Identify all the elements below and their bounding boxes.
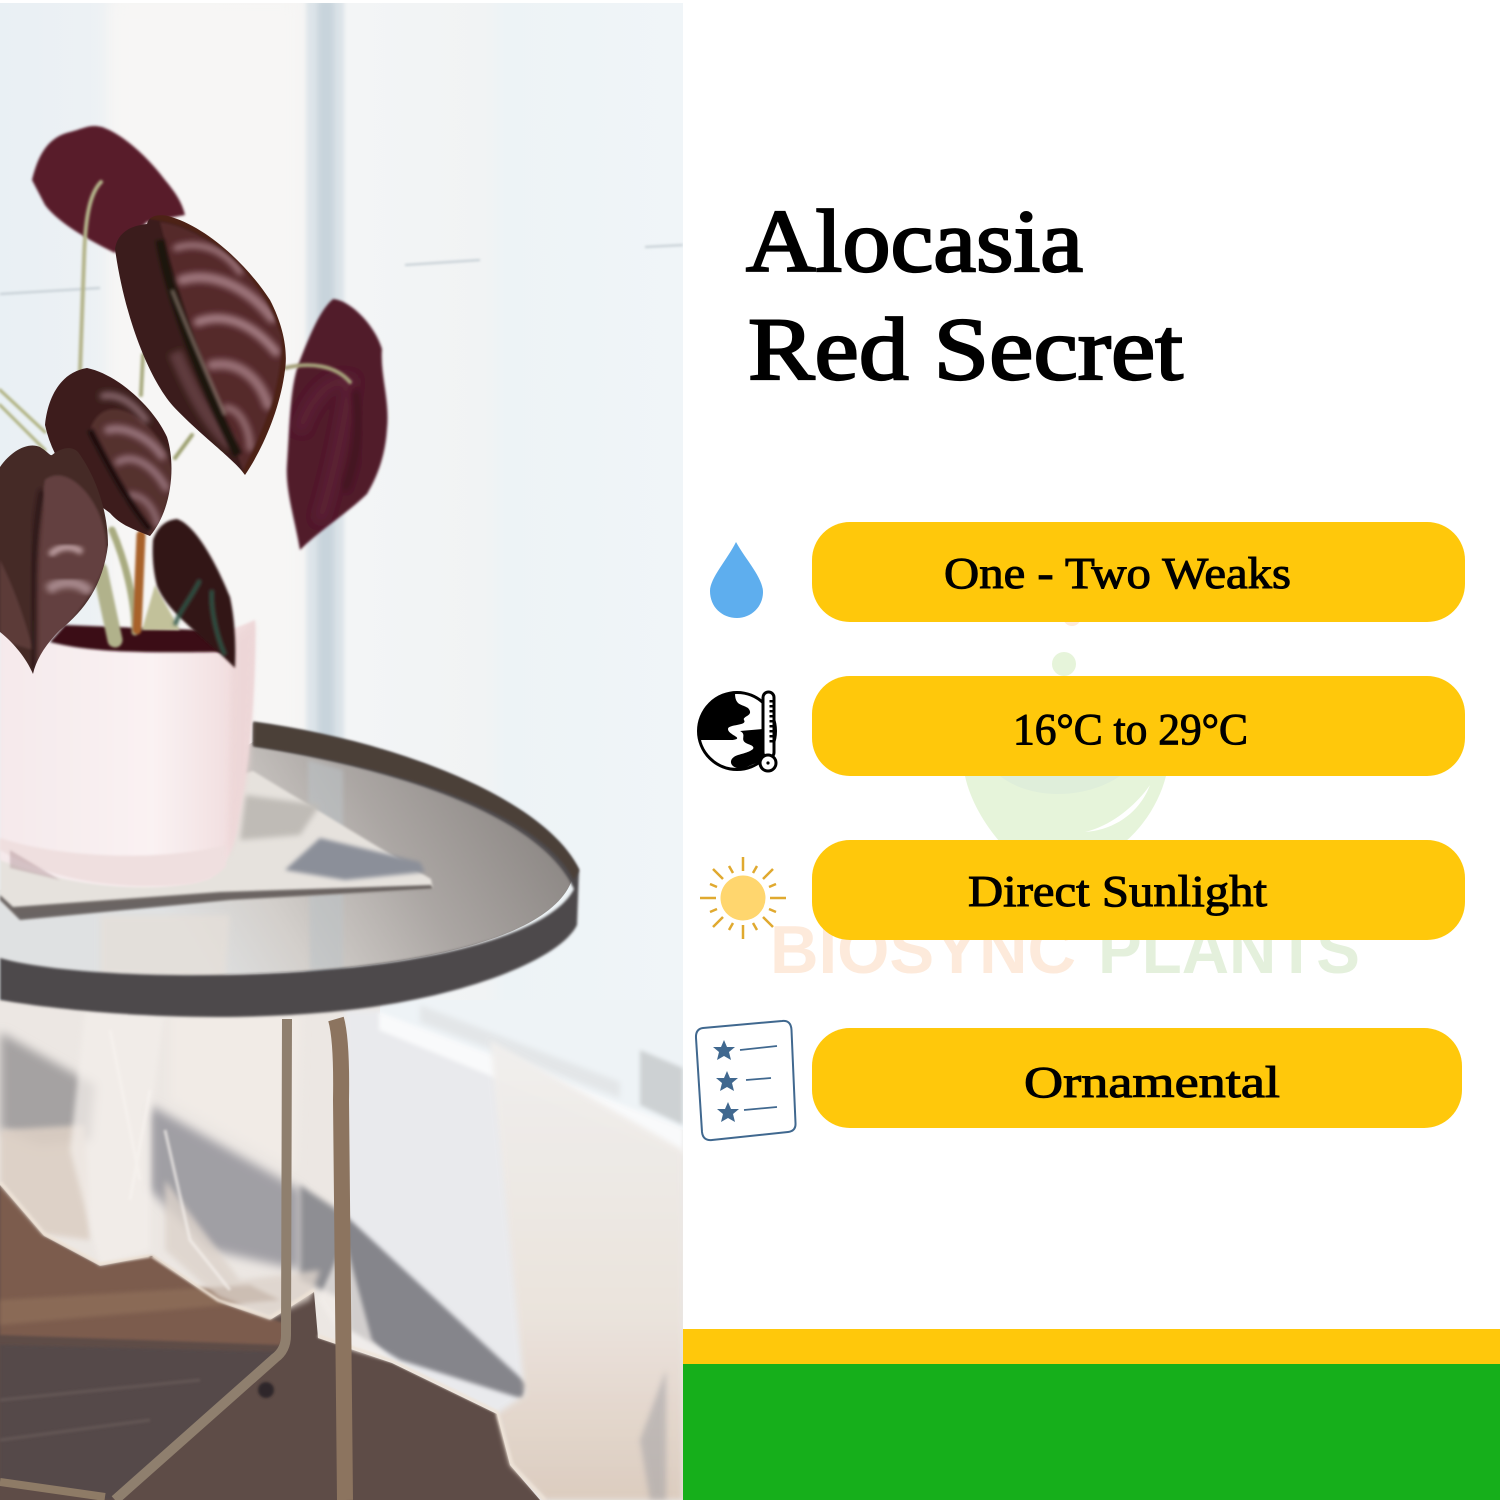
pill: light xyxy=(812,840,1465,940)
photo: middle patterned leaf xyxy=(45,368,172,536)
icon: water drop xyxy=(710,542,763,618)
photo: grey baseboard seen through the curtain xyxy=(0,1032,527,1399)
photo: leaf, back maroon xyxy=(32,126,185,253)
photo: lower wall and radiator xyxy=(0,1000,683,1500)
photo: wood floor xyxy=(0,1185,540,1500)
pill: temperature: 16°C to 29°C xyxy=(1013,705,1248,754)
photo: sheer curtain folds xyxy=(0,1010,683,1500)
title xyxy=(746,193,1183,399)
panel: plant photo xyxy=(0,0,683,1500)
photo: window wall background xyxy=(0,3,683,1000)
photo: round glass table top xyxy=(0,722,579,1017)
title: Alocasia xyxy=(746,193,1083,291)
photo: pot xyxy=(0,620,255,887)
photo: magazine xyxy=(0,771,433,920)
icon: sun xyxy=(700,857,786,939)
photo: lower left patterned leaf xyxy=(0,446,108,674)
photo: leaf, right maroon xyxy=(287,299,388,550)
watermark: Biosync Plants logo: BIOSYNC xyxy=(770,912,1076,988)
photo: soil in pot xyxy=(50,625,225,652)
pill: temperature xyxy=(812,676,1465,776)
photo: plant stems xyxy=(0,182,350,640)
footer: yellow band xyxy=(683,1329,1500,1364)
icon: rated checklist xyxy=(696,1021,796,1140)
pill: use xyxy=(812,1028,1462,1128)
pill: use: Ornamental xyxy=(1024,1058,1280,1107)
pill: light: Direct Sunlight xyxy=(968,867,1267,916)
footer: green band xyxy=(683,1364,1500,1500)
pill: watering: One - Two Weaks xyxy=(944,549,1291,598)
title: Red Secret xyxy=(748,301,1183,399)
photo: large patterned leaf xyxy=(115,215,286,475)
photo: front small dark leaf xyxy=(153,519,235,668)
watermark: Biosync Plants logo xyxy=(770,608,1360,988)
pill: watering xyxy=(812,522,1465,622)
watermark: Biosync Plants logo: PLANTS xyxy=(1098,912,1360,988)
icon: earth with thermometer xyxy=(698,692,776,771)
photo: table legs xyxy=(0,1019,345,1500)
